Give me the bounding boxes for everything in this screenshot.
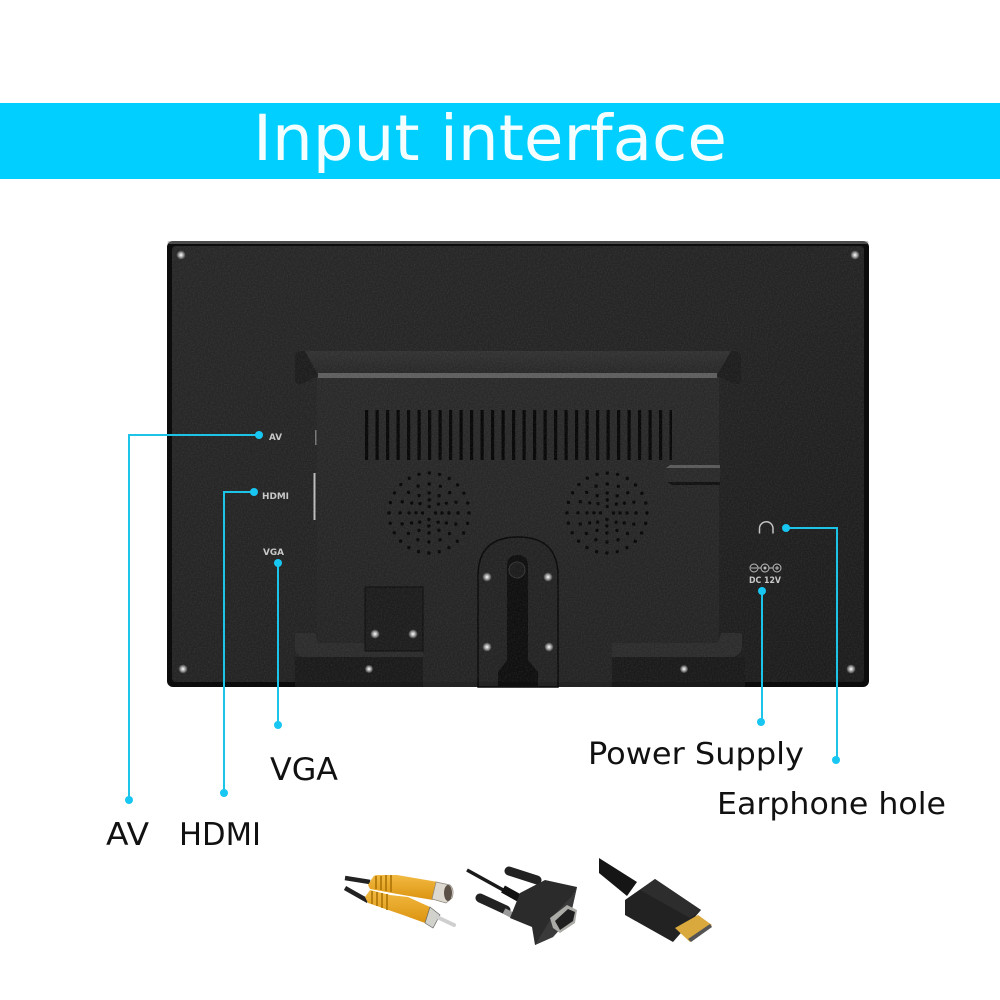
printed VGA: VGA [263,548,284,558]
photo: HDMI cable [599,858,712,942]
surface grain [172,246,864,682]
icon: headphones [760,522,773,534]
right lower flange [612,633,742,657]
printed AV: AV [269,433,282,443]
icon: DC polarity [750,564,781,572]
callout lines [129,435,837,800]
upper RCA connector [368,875,438,900]
label: HDMI: HDMI [179,817,261,853]
rear housing [295,351,745,687]
power line [761,591,763,722]
speaker grille right [567,473,647,553]
earphone line [786,528,837,760]
AV line [129,435,259,800]
photo: VGA cable [467,870,577,945]
VGA line [277,563,279,725]
lower RCA connector [365,890,430,923]
bracket plate [365,587,423,651]
cable clip [663,465,720,485]
stand arm [478,537,558,687]
ventilation slots [365,410,672,460]
label: Earphone hole: Earphone hole [717,787,946,822]
photo: RCA cable [345,875,454,928]
HDMI line [224,492,254,793]
monitor back panel [167,241,869,687]
printed HDMI: HDMI [262,492,289,502]
left lower flange [295,633,423,657]
printed DC 12V: DC 12V [749,576,781,586]
label: VGA: VGA [270,752,338,788]
title: Input interface [253,102,727,175]
speaker grille left [389,473,469,553]
callout dots [125,431,840,804]
printed port labels [262,433,781,586]
label: AV: AV [106,817,149,853]
title banner [0,102,1000,179]
label: Power Supply: Power Supply [588,737,804,772]
panel screws [176,250,860,674]
